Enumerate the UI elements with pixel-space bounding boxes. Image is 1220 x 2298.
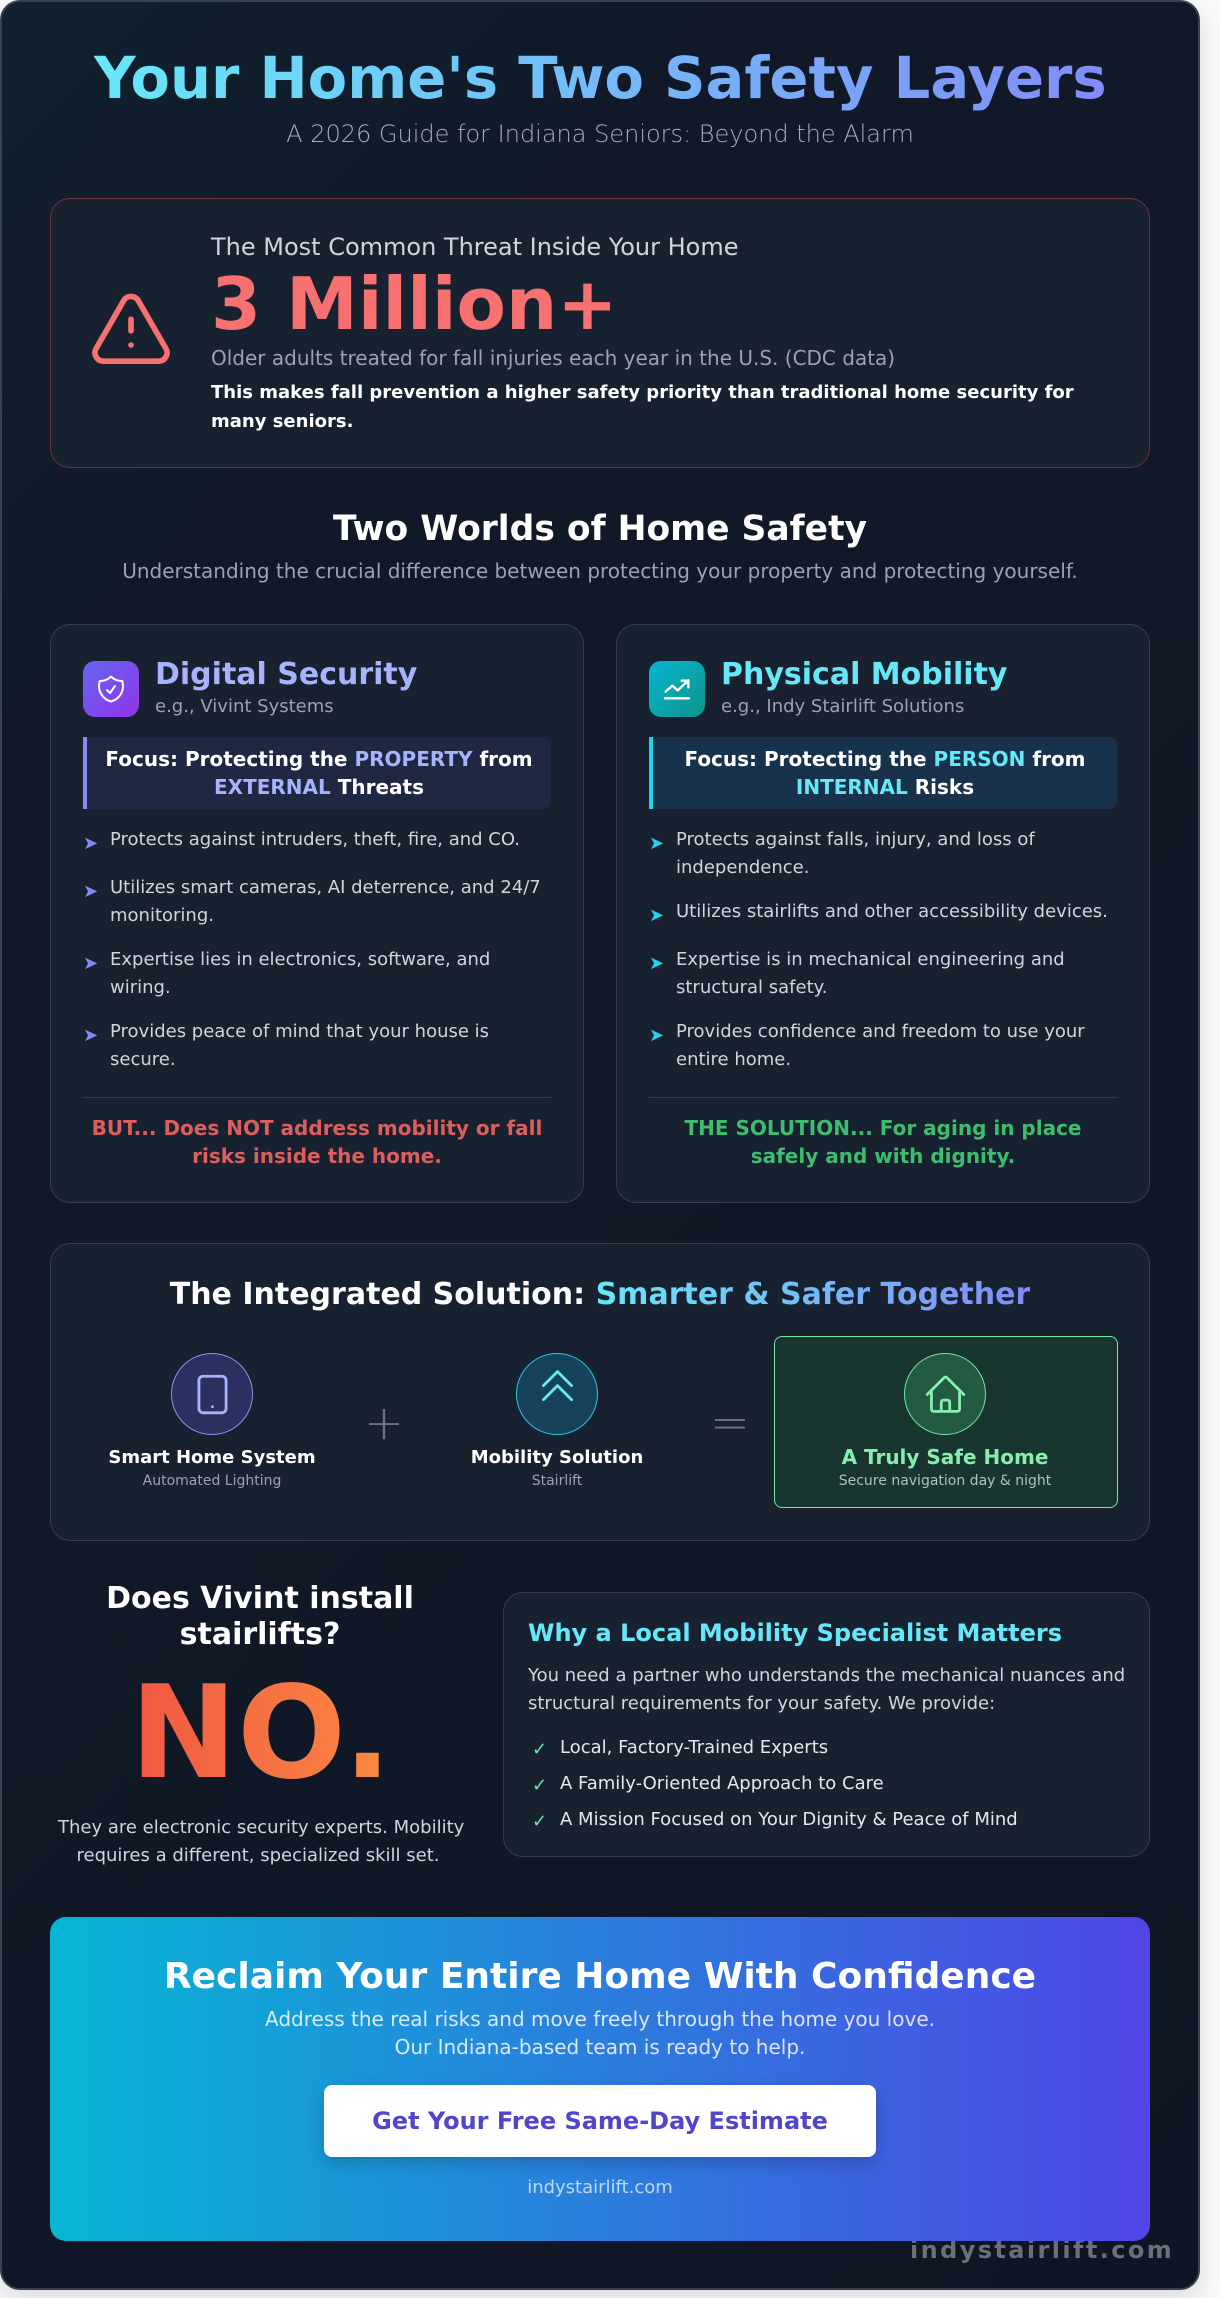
answer explanation	[58, 1817, 464, 1866]
answer: NO.	[130, 1659, 392, 1808]
statistic number: 3 Million+	[211, 262, 618, 346]
question: stairlifts?	[180, 1617, 340, 1652]
divider	[83, 1097, 551, 1098]
list item	[83, 1021, 489, 1070]
specialist paragraph: structural requirements for your safety. We provide:	[528, 1693, 995, 1714]
section subheading: Understanding the crucial difference between protecting your property and protecting yourself.	[122, 559, 1078, 583]
cta text: Our Indiana-based team is ready to help.	[395, 2035, 805, 2059]
watermark: indystairlift.com	[910, 2236, 1174, 2264]
list item: ➤	[649, 833, 664, 854]
answer explanation: requires a different, specialized skill set.	[76, 1845, 439, 1866]
list item: Expertise lies in electronics, software, and	[110, 949, 490, 970]
icon: double chevron	[516, 1353, 598, 1435]
cta button: Get Your Free Same-Day Estimate	[372, 2107, 828, 2135]
label: safe home: A Truly Safe Home	[842, 1445, 1048, 1469]
divider	[649, 1097, 1117, 1098]
list item: monitoring.	[110, 905, 214, 926]
card conclusion: risks inside the home.	[192, 1144, 442, 1168]
focus box: Focus: Protecting the PROPERTY from	[105, 747, 533, 771]
label: mobility: Mobility Solution	[471, 1447, 643, 1468]
answer explanation: They are electronic security experts. Mobility	[58, 1817, 464, 1838]
list item	[649, 1021, 1085, 1070]
focus box: INTERNAL Risks	[796, 775, 974, 799]
icon: house	[904, 1353, 986, 1435]
list item	[649, 949, 1065, 998]
card conclusion: THE SOLUTION... For aging in place	[684, 1116, 1082, 1140]
statistic note: This makes fall prevention a higher safety priority than traditional home security for	[211, 382, 1074, 403]
cta site: indystairlift.com	[527, 2177, 673, 2198]
card subtitle: e.g., Vivint Systems	[155, 696, 334, 717]
cta text: Address the real risks and move freely through the home you love.	[265, 2007, 935, 2031]
cta text	[265, 2007, 935, 2059]
sublabel: Automated Lighting	[143, 1473, 281, 1489]
panel: call to action	[50, 1917, 1150, 2241]
statistic note: many seniors.	[211, 411, 353, 432]
panel: integrated solution	[50, 1243, 1150, 1541]
panel: digital security	[50, 624, 584, 1203]
list item: Expertise is in mechanical engineering and	[676, 949, 1065, 970]
card conclusion	[92, 1116, 542, 1168]
list item: Provides peace of mind that your house is	[110, 1021, 489, 1042]
focus box: EXTERNAL Threats	[214, 775, 424, 799]
icon: shield	[83, 661, 139, 717]
list item: Provides confidence and freedom to use your	[676, 1021, 1085, 1042]
cta heading: Reclaim Your Entire Home With Confidence	[164, 1956, 1036, 1997]
title: Your Home's Two Safety Layers	[94, 45, 1107, 112]
list item: structural safety.	[676, 977, 827, 998]
card title: Physical Mobility	[721, 657, 1007, 692]
cta button	[324, 2085, 876, 2157]
icon: tablet	[171, 1353, 253, 1435]
list item: ➤	[649, 953, 664, 974]
card conclusion: BUT... Does NOT address mobility or fall	[92, 1116, 542, 1140]
integrated heading: The Integrated Solution: Smarter & Safer Together	[170, 1277, 1030, 1312]
plus operator: +	[364, 1395, 404, 1451]
list item: Utilizes stairlifts and other accessibility devices.	[676, 901, 1108, 922]
list item: ➤	[83, 833, 98, 854]
question: Does Vivint install	[106, 1581, 414, 1616]
check item: ✓	[532, 1739, 547, 1760]
check item: ✓	[532, 1775, 547, 1796]
statistic description: Older adults treated for fall injuries each year in the U.S. (CDC data)	[211, 346, 895, 370]
card title: Digital Security	[155, 657, 417, 692]
equals operator: =	[710, 1395, 750, 1451]
section heading: Two Worlds of Home Safety	[333, 509, 867, 549]
panel: fall statistic	[50, 198, 1150, 468]
list item: ➤	[83, 1025, 98, 1046]
result box	[774, 1336, 1118, 1508]
focus box	[83, 737, 551, 809]
list item: Protects against falls, injury, and loss of	[676, 829, 1035, 850]
list item: ➤	[649, 905, 664, 926]
check item: A Family-Oriented Approach to Care	[560, 1773, 884, 1794]
icon: warning triangle	[92, 294, 170, 364]
panel: physical mobility	[616, 624, 1150, 1203]
panel: local specialist	[503, 1592, 1150, 1857]
check item: Local, Factory-Trained Experts	[560, 1737, 828, 1758]
question	[106, 1581, 414, 1652]
list item: independence.	[676, 857, 809, 878]
card conclusion: safely and with dignity.	[751, 1144, 1015, 1168]
subtitle: A 2026 Guide for Indiana Seniors: Beyond the Alarm	[286, 120, 914, 148]
list item: entire home.	[676, 1049, 791, 1070]
list item	[83, 949, 490, 998]
card subtitle: e.g., Indy Stairlift Solutions	[721, 696, 964, 717]
focus box: Focus: Protecting the PERSON from	[684, 747, 1086, 771]
sublabel: Secure navigation day & night	[839, 1473, 1051, 1489]
specialist paragraph	[528, 1665, 1125, 1714]
list item: secure.	[110, 1049, 176, 1070]
list item: ➤	[83, 881, 98, 902]
sublabel: Stairlift	[532, 1473, 582, 1489]
specialist paragraph: You need a partner who understands the mechanical nuances and	[528, 1665, 1125, 1686]
check item: ✓	[532, 1811, 547, 1832]
focus box	[649, 737, 1117, 809]
list item	[83, 877, 541, 926]
list item	[649, 829, 1036, 878]
list item: Protects against intruders, theft, fire, and CO.	[110, 829, 520, 850]
specialist heading: Why a Local Mobility Specialist Matters	[528, 1619, 1062, 1647]
icon: trending chart	[649, 661, 705, 717]
statistic label: The Most Common Threat Inside Your Home	[211, 233, 738, 261]
list item: ➤	[649, 1025, 664, 1046]
card conclusion	[684, 1116, 1082, 1168]
statistic note	[211, 382, 1074, 432]
list item: Utilizes smart cameras, AI deterrence, and 24/7	[110, 877, 541, 898]
list item: ➤	[83, 953, 98, 974]
label: smart home: Smart Home System	[108, 1447, 316, 1468]
check item: A Mission Focused on Your Dignity & Peace of Mind	[560, 1809, 1018, 1830]
list item: wiring.	[110, 977, 171, 998]
